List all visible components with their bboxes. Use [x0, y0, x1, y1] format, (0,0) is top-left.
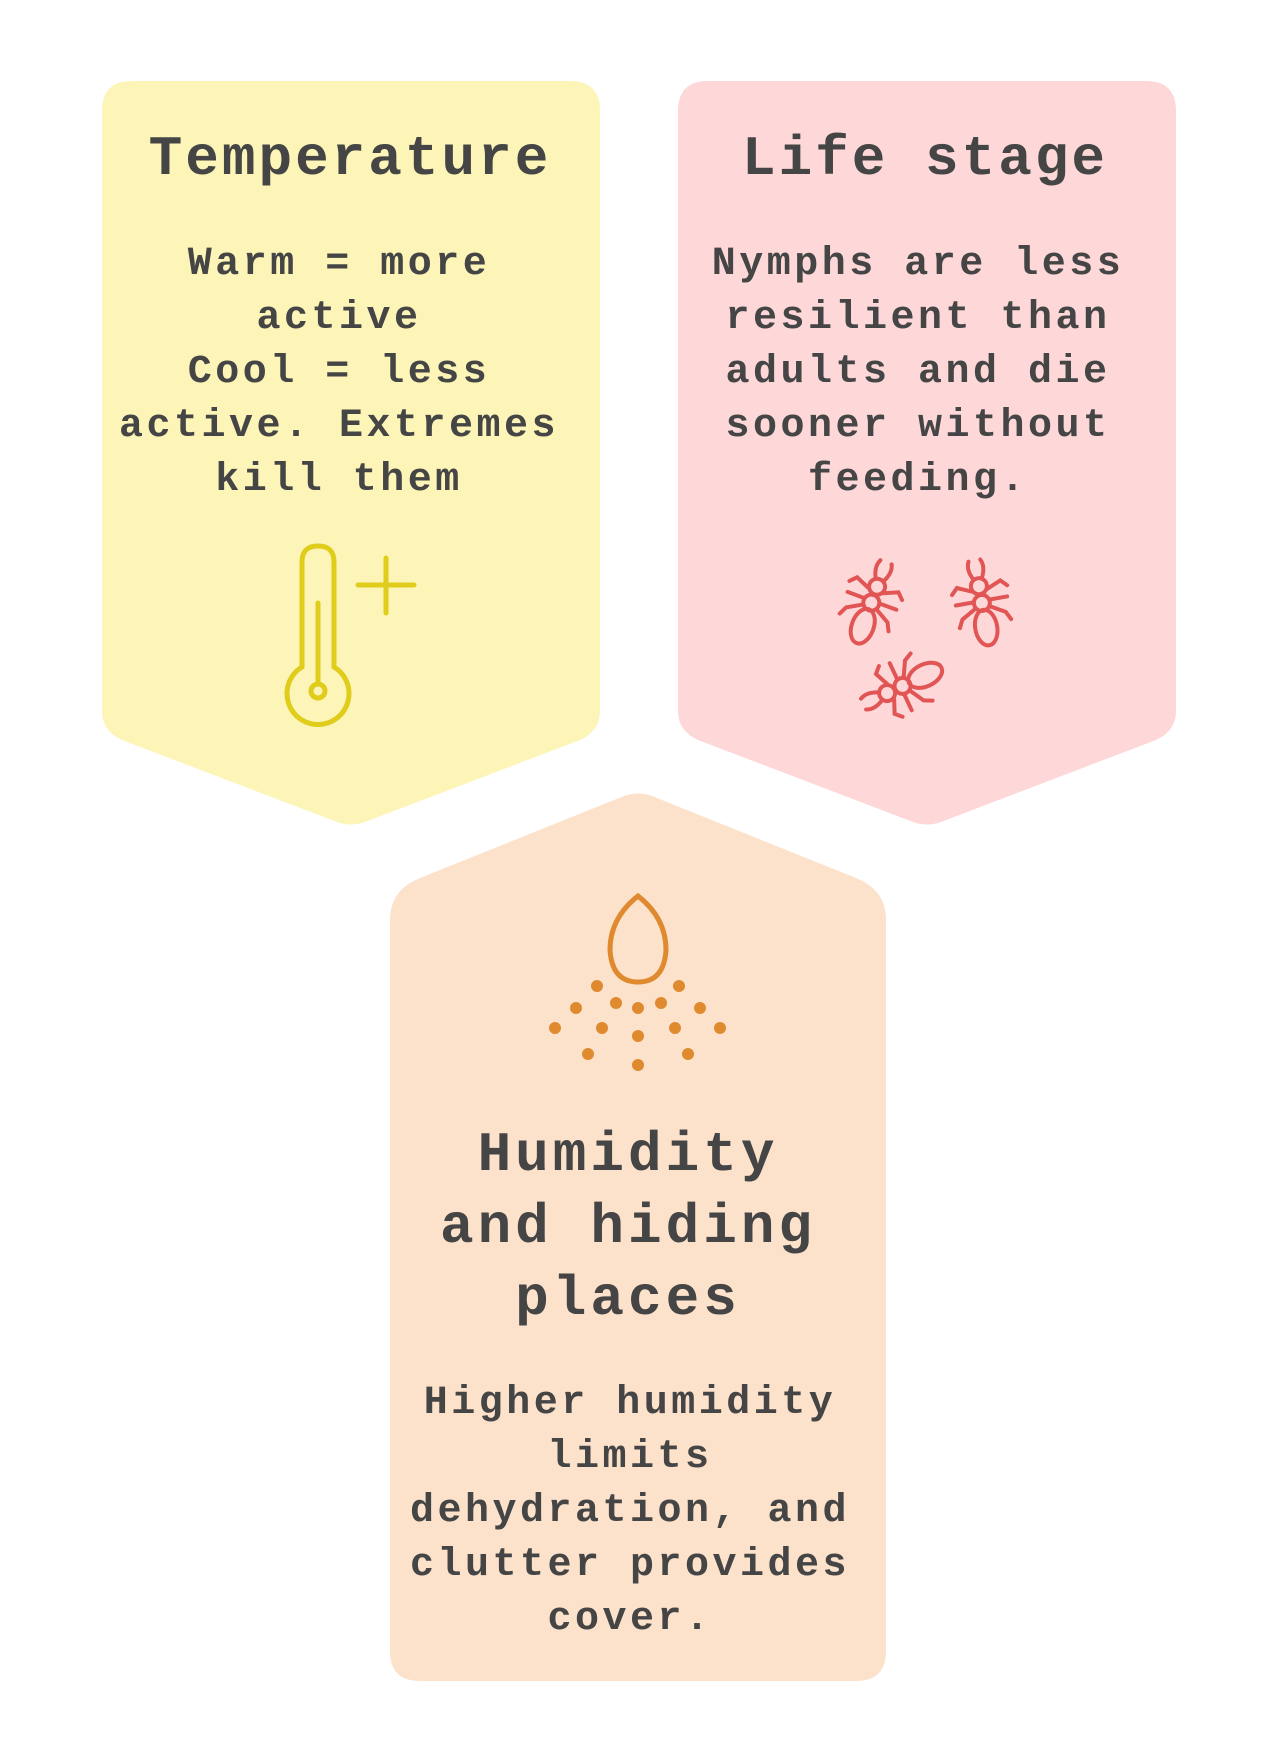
heading: Life stage: Life stage	[742, 127, 1108, 191]
panel: humidity	[390, 794, 886, 1681]
text block: temperature: active	[256, 296, 422, 341]
heading: Humidity and hiding places: places	[515, 1267, 741, 1331]
text block: humidity: clutter provides	[410, 1543, 850, 1588]
text block: temperature: active. Extremes	[119, 404, 559, 449]
panel: life stage	[678, 81, 1176, 824]
text block: life stage: sooner without	[725, 404, 1111, 449]
text block: temperature: kill them	[215, 458, 463, 503]
text block: humidity: Higher humidity	[424, 1381, 836, 1426]
text block: temperature: Cool = less	[188, 350, 490, 395]
text block: life stage: adults and die	[725, 350, 1111, 395]
heading: Humidity and hiding places: and hiding	[440, 1195, 816, 1259]
heading: Temperature: Temperature	[149, 127, 551, 191]
panel: temperature	[102, 81, 600, 824]
icon: bugs	[830, 553, 1017, 729]
text block: humidity: cover.	[547, 1597, 713, 1642]
icon: water drop with dots	[549, 896, 726, 1071]
text block: humidity: dehydration, and	[410, 1489, 850, 1534]
text block: humidity: limits	[547, 1435, 713, 1480]
icon: thermometer	[287, 546, 414, 725]
text block: life stage: Nymphs are less	[712, 242, 1124, 287]
text block: life stage: feeding.	[808, 458, 1028, 503]
text block: life stage: resilient than	[725, 296, 1111, 341]
text block: temperature: Warm = more	[188, 242, 490, 287]
heading: Humidity and hiding places: Humidity	[478, 1123, 778, 1187]
